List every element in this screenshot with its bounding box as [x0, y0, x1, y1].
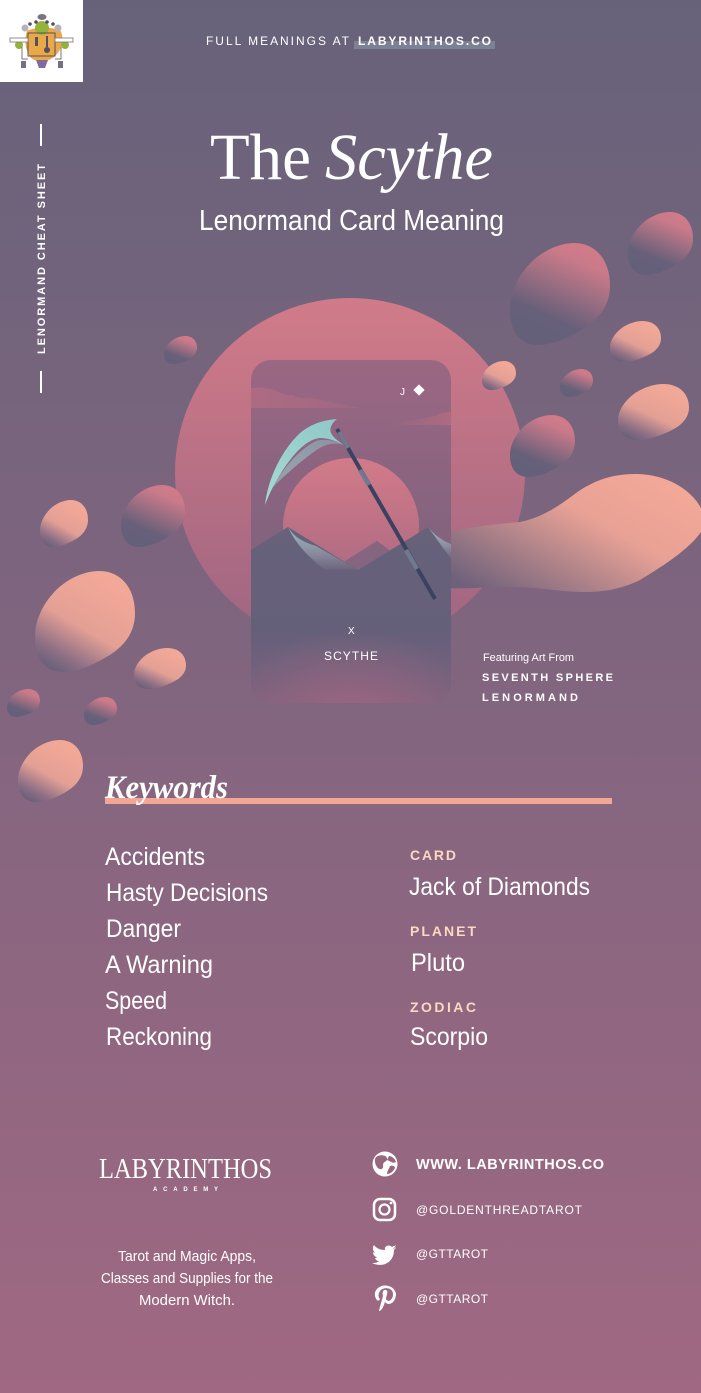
academy description: Classes and Supplies for the — [101, 1270, 273, 1287]
planet correspondence: PLANET — [410, 923, 476, 939]
instagram handle: @GOLDENTHREADTAROT — [416, 1203, 583, 1217]
art credit: Featuring Art From — [483, 652, 574, 664]
floating blobs — [7, 212, 693, 802]
keywords list: Reckoning — [106, 1023, 212, 1051]
front mountains — [251, 527, 451, 680]
academy description: Modern Witch. — [139, 1292, 235, 1309]
zodiac correspondence: ZODIAC — [410, 999, 476, 1015]
academy description: Tarot and Magic Apps, — [118, 1248, 256, 1265]
academy logo: LABYRINTHOS — [99, 1154, 272, 1185]
card number: X — [348, 626, 355, 637]
keywords list: Speed — [105, 987, 167, 1015]
mountain snow — [288, 527, 358, 570]
scythe — [265, 419, 435, 599]
card name: SCYTHE — [324, 649, 378, 663]
art credit: SEVENTH SPHERE — [482, 672, 613, 684]
header link: LABYRINTHOS.CO — [358, 34, 491, 48]
subtitle: Lenormand Card Meaning — [199, 205, 504, 237]
zodiac correspondence — [410, 999, 488, 1051]
card suit — [400, 384, 425, 398]
card suit: J — [400, 387, 405, 398]
keywords list: A Warning — [105, 951, 213, 979]
icon: pinterest — [375, 1286, 396, 1311]
card bottom glow — [260, 645, 442, 703]
tarot card — [251, 360, 451, 703]
art credit — [482, 652, 613, 704]
keywords list: Hasty Decisions — [106, 879, 268, 907]
card correspondence — [409, 847, 590, 901]
keywords list — [105, 843, 268, 1051]
keywords list: Accidents — [105, 843, 205, 871]
vertical label: LENORMAND CHEAT SHEET — [36, 164, 48, 354]
pinterest handle: @GTTAROT — [416, 1292, 489, 1306]
card clouds — [251, 388, 451, 425]
card correspondence: CARD — [410, 847, 456, 863]
large sun circle — [175, 298, 525, 648]
card correspondence: Jack of Diamonds — [409, 873, 590, 901]
keywords heading — [104, 770, 612, 806]
icon: instagram — [374, 1199, 395, 1220]
academy description — [101, 1248, 273, 1309]
planet correspondence: Pluto — [411, 949, 465, 977]
icon: twitter — [372, 1245, 396, 1265]
logo badge — [0, 0, 83, 82]
icon: globe — [372, 1152, 398, 1176]
header link: FULL MEANINGS AT — [206, 34, 350, 48]
keywords heading: Keywords — [104, 770, 228, 806]
website: WWW. LABYRINTHOS.CO — [416, 1157, 604, 1173]
zodiac correspondence: Scorpio — [410, 1023, 488, 1051]
large flowing blob — [440, 474, 701, 592]
twitter handle: @GTTAROT — [416, 1247, 489, 1261]
title — [210, 121, 493, 194]
card sun — [283, 458, 419, 562]
header link — [206, 34, 495, 49]
keywords list: Danger — [106, 915, 181, 943]
art credit: LENORMAND — [482, 692, 578, 704]
back mountain — [345, 541, 390, 570]
title: The — [210, 121, 311, 194]
academy logo: ACADEMY — [153, 1187, 218, 1193]
planet correspondence — [410, 923, 476, 977]
title: Scythe — [325, 121, 493, 194]
